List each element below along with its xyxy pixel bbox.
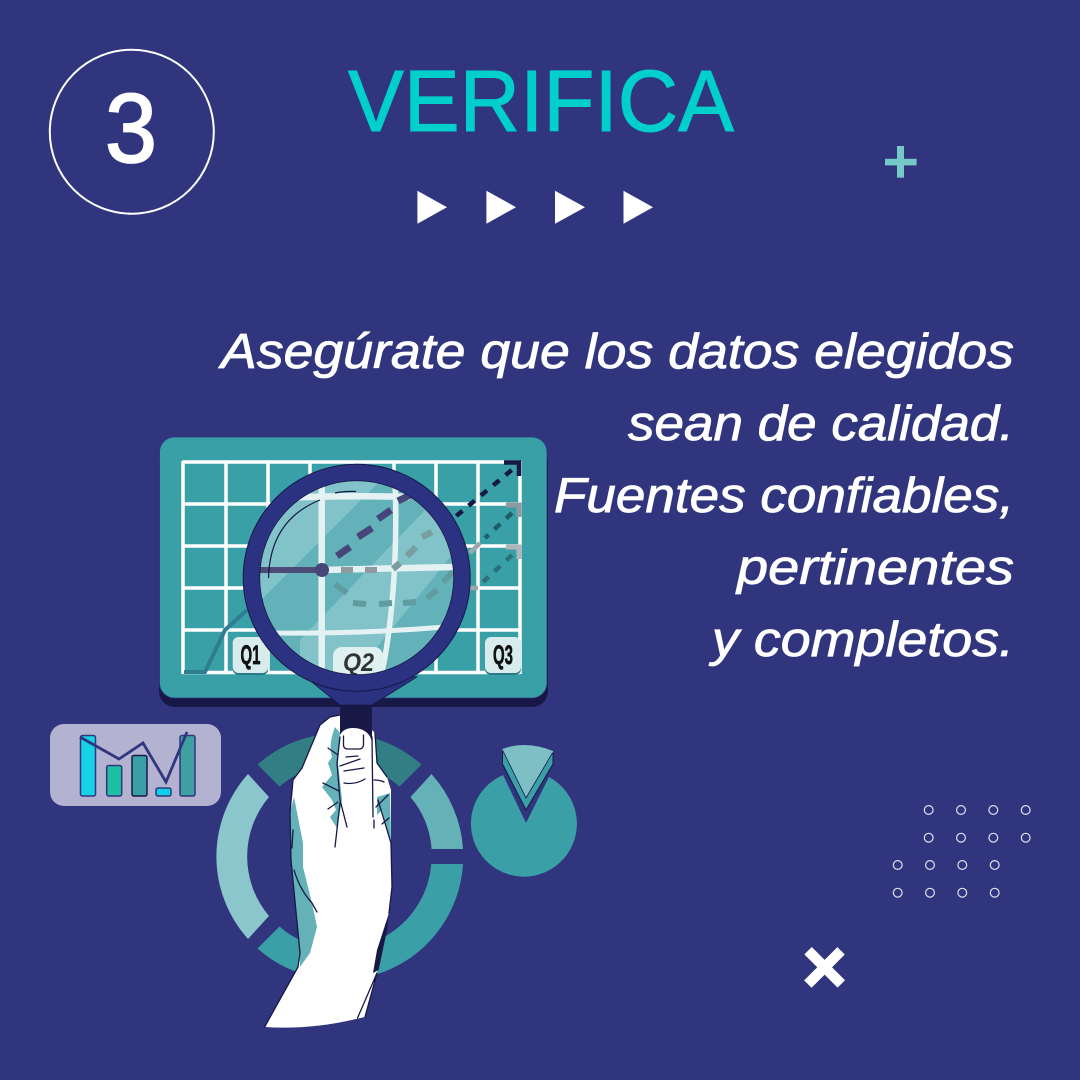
rising line [184, 610, 247, 672]
body text: Fuentes confiables, [554, 469, 1014, 523]
lens glare [268, 491, 356, 578]
title: VERIFICA [348, 53, 734, 150]
zoomed dashes teal [335, 572, 453, 604]
lens [260, 481, 454, 675]
icon: plus [885, 146, 917, 178]
number badge [50, 50, 214, 214]
Q3 tag: Q3 [493, 640, 513, 670]
body text [218, 325, 1014, 667]
corner marks [504, 462, 519, 559]
body text: pertinentes [735, 541, 1014, 595]
icon: cross [791, 934, 858, 1001]
Q2 tag [333, 647, 383, 675]
hand [265, 715, 392, 1028]
Q1 tag: Q1 [240, 640, 260, 670]
number badge: 3 [105, 73, 157, 183]
zoomed dashes dark [337, 495, 410, 556]
body text: y completos. [709, 613, 1014, 667]
rim [243, 464, 470, 691]
hand linework [265, 715, 392, 1027]
magnifying glass [243, 464, 470, 762]
grid [182, 461, 520, 674]
body text: sean de calidad. [628, 397, 1014, 451]
ring chart [216, 733, 463, 980]
body text: Asegúrate que los datos elegidos [218, 325, 1014, 379]
bar chart card [50, 724, 221, 806]
neck [297, 670, 417, 705]
Q2 tag: Q2 [343, 649, 374, 677]
dot grid [893, 806, 1030, 897]
dashed trend lines [455, 470, 512, 588]
hand shadows [290, 727, 391, 967]
highlighted baseline [260, 567, 316, 573]
dark edge [373, 913, 389, 973]
zoomed dashes grey [393, 532, 432, 569]
handle [340, 700, 372, 762]
Q1 tag [233, 637, 268, 675]
icon: four arrows [417, 191, 653, 224]
panel: chart tablet [159, 437, 548, 707]
pie chart [471, 746, 577, 877]
Q3 tag [485, 637, 521, 675]
